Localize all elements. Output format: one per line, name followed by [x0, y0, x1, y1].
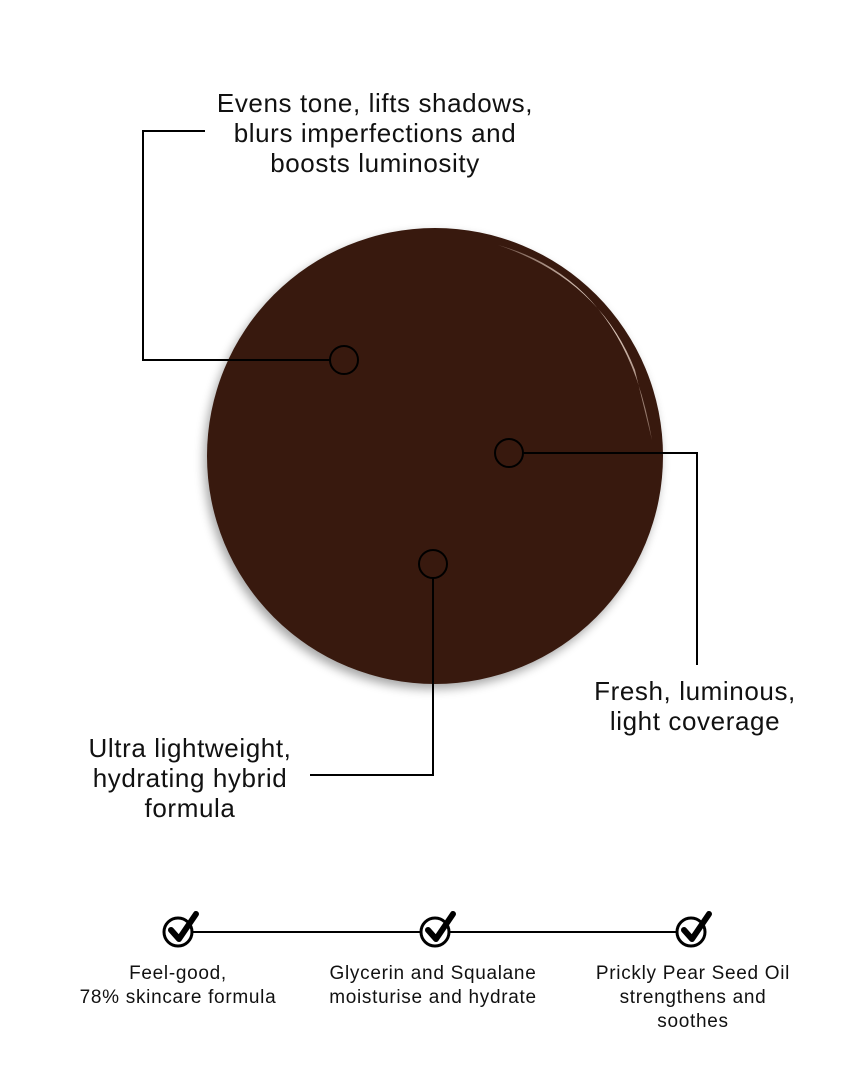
text: fresh luminous: light coverage: [610, 706, 780, 736]
text: fresh luminous: [594, 676, 796, 736]
text: prickly pear: strengthens and: [620, 987, 766, 1008]
text: evens tone: blurs imperfections and: [234, 118, 516, 148]
text: evens tone: [217, 88, 533, 178]
text: prickly pear: Prickly Pear Seed Oil: [596, 963, 790, 984]
timeline with check icons: [164, 914, 709, 946]
text: ultra lightweight: [88, 733, 292, 823]
text: feel-good: [80, 963, 276, 1008]
text: ultra lightweight: hydrating hybrid: [93, 763, 287, 793]
text: evens tone: boosts luminosity: [270, 148, 480, 178]
callout line: bottom: [310, 550, 447, 775]
text: glycerin: moisturise and hydrate: [329, 987, 537, 1008]
text: glycerin: Glycerin and Squalane: [330, 963, 536, 984]
text: ultra lightweight: formula: [145, 793, 235, 823]
swatch circle: [204, 228, 663, 689]
text: feel-good: Feel-good,: [129, 963, 227, 984]
text: evens tone: Evens tone, lifts shadows,: [217, 88, 533, 118]
text: ultra lightweight: Ultra lightweight,: [88, 733, 292, 763]
text: glycerin: [329, 963, 537, 1008]
text: prickly pear: [596, 963, 790, 1032]
callout line: right: [495, 439, 697, 665]
text: feel-good: 78% skincare formula: [80, 987, 276, 1008]
text: prickly pear: soothes: [657, 1011, 729, 1032]
text: fresh luminous: Fresh, luminous,: [594, 676, 796, 706]
callout line: top-left: [143, 131, 358, 374]
